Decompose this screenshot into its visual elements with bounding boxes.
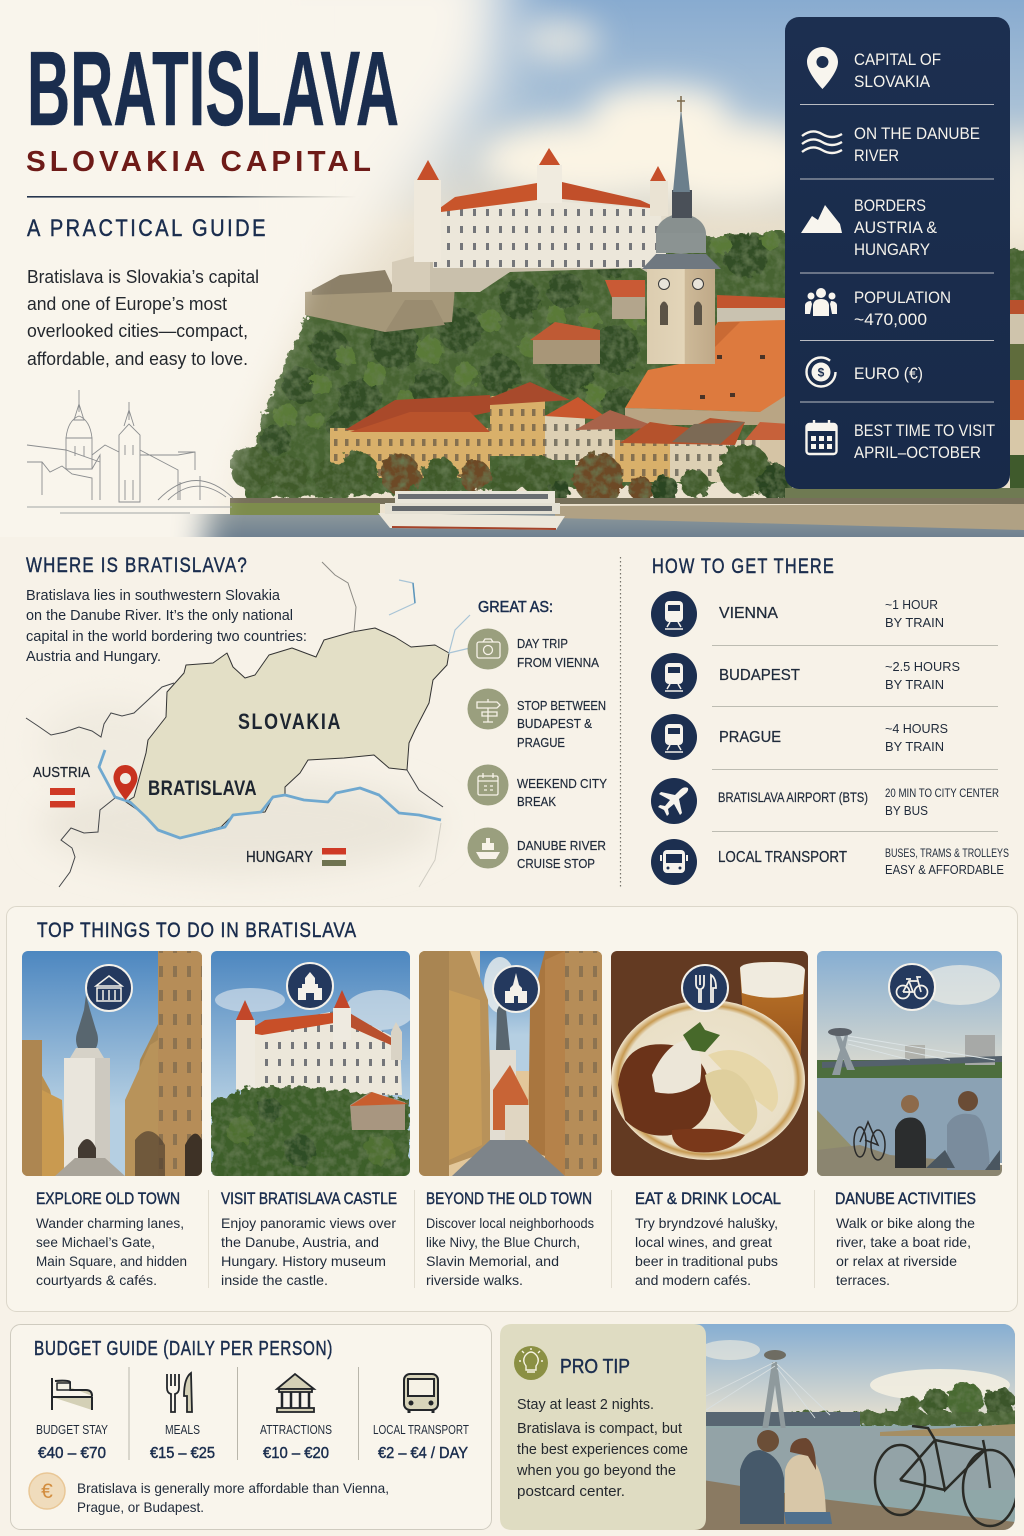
route: Vienna: VIENNA — [719, 605, 779, 622]
card text: Try bryndzové halušky, — [635, 1215, 778, 1231]
heading: pro tip: PRO TIP — [560, 1355, 630, 1378]
card: explore old town — [22, 951, 202, 1288]
label: Austria: AUSTRIA — [33, 764, 90, 781]
item: weekend break — [517, 776, 607, 809]
route: Vienna — [651, 591, 944, 637]
icon: coin — [806, 358, 836, 386]
card text — [635, 1215, 778, 1288]
panel: pro tip — [500, 1324, 1020, 1530]
tip text: Stay at least 2 nights. — [517, 1396, 654, 1413]
fact: capital: CAPITAL OF — [854, 51, 941, 69]
list: great as: GREAT AS: — [478, 599, 553, 616]
tip text: the best experiences come — [517, 1441, 688, 1458]
card text — [36, 1215, 187, 1288]
panel: quick facts — [785, 17, 1010, 489]
icon: coin: $ — [818, 366, 825, 380]
fact: danube: RIVER — [854, 147, 899, 165]
icon: map pin — [807, 47, 838, 89]
fact: euro: EURO (€) — [854, 365, 923, 383]
route: Budapest: ~2.5 HOURS — [885, 659, 960, 674]
card text: Hungary. History museum — [221, 1253, 386, 1269]
fact: capital: SLOVAKIA — [854, 73, 930, 91]
card text: Slavin Memorial, and — [426, 1253, 559, 1269]
card heading: EAT & DRINK LOCAL — [635, 1190, 781, 1208]
item: budget stay: €40 – €70 — [38, 1445, 106, 1462]
hero photo: castle and town — [182, 0, 1024, 537]
item: local transport: LOCAL TRANSPORT — [373, 1422, 469, 1437]
card text: local wines, and great — [635, 1234, 772, 1250]
icon: signpost — [468, 688, 508, 730]
fact: population: ~470,000 — [854, 311, 927, 329]
flag: Austria — [50, 788, 75, 808]
card text: the Danube, Austria, and — [221, 1234, 379, 1250]
icon: fork and knife — [167, 1373, 192, 1412]
card text: like Nivy, the Blue Church, — [426, 1234, 580, 1250]
fact: borders: HUNGARY — [854, 241, 930, 259]
budget note: Prague, or Budapest. — [77, 1499, 204, 1515]
card text: courtyards & cafés. — [36, 1272, 157, 1288]
card heading: EXPLORE OLD TOWN — [36, 1190, 180, 1208]
intro paragraph: overlooked cities—compact, — [27, 321, 248, 341]
tip text: Bratislava is compact, but — [517, 1420, 683, 1437]
sketch of city skyline — [27, 390, 233, 513]
card text — [426, 1215, 594, 1288]
route: Prague — [651, 714, 948, 760]
item: cruise stop: DANUBE RIVER — [517, 838, 606, 853]
fact: capital — [854, 54, 940, 87]
card text: Wander charming lanes, — [36, 1215, 184, 1231]
route: Vienna: ~1 HOUR — [885, 597, 938, 612]
item: local transport — [373, 1374, 469, 1462]
icon: camera — [468, 628, 508, 670]
item: day trip: FROM VIENNA — [517, 655, 599, 670]
item: stop between: BUDAPEST & — [517, 716, 592, 731]
route: airport: BRATISLAVA AIRPORT (BTS) — [718, 789, 868, 805]
item: weekend break: WEEKEND CITY — [517, 776, 607, 791]
label: Bratislava: BRATISLAVA — [148, 776, 257, 800]
description paragraph: Austria and Hungary. — [26, 649, 161, 665]
item: meals: MEALS — [165, 1422, 200, 1437]
card heading: DANUBE ACTIVITIES — [835, 1190, 976, 1208]
fact: best time: BEST TIME TO VISIT — [854, 422, 995, 440]
route: Budapest: BUDAPEST — [719, 667, 801, 684]
fact: danube — [854, 128, 980, 161]
item: stop between: STOP BETWEEN — [517, 698, 606, 713]
subtitle: SLOVAKIA CAPITAL — [26, 146, 375, 178]
photo: couple by the Danube — [600, 1324, 1020, 1530]
fact: best time: APRIL–OCTOBER — [854, 444, 981, 462]
budget note: Bratislava is generally more affordable than Vienna, — [77, 1480, 389, 1496]
route: Prague: ~4 HOURS — [885, 721, 948, 736]
panel: how to get there — [651, 554, 1009, 885]
card text: or relax at riverside — [836, 1253, 957, 1269]
card text: Enjoy panoramic views over — [221, 1215, 396, 1231]
budget note — [77, 1480, 389, 1515]
photo: cobbled street — [419, 951, 602, 1176]
label: Hungary: HUNGARY — [246, 849, 313, 866]
description paragraph: on the Danube River. It’s the only national — [26, 608, 293, 624]
intro paragraph: Bratislava is Slovakia’s capital — [27, 267, 259, 287]
fact: best time — [854, 424, 995, 458]
item: attractions: €10 – €20 — [263, 1445, 329, 1462]
hero panel — [26, 0, 1024, 537]
item: attractions — [260, 1374, 332, 1462]
heading: where is: WHERE IS BRATISLAVA? — [26, 553, 248, 577]
icon: euro coin — [29, 1473, 65, 1509]
route: local transport: EASY & AFFORDABLE — [885, 862, 1004, 877]
card text: Walk or bike along the — [836, 1215, 975, 1231]
route: local transport — [651, 839, 1009, 885]
heading: top things: TOP THINGS TO DO IN BRATISLAVA — [37, 919, 357, 942]
card text: riverside walks. — [426, 1272, 523, 1288]
item: budget stay: BUDGET STAY — [36, 1422, 108, 1437]
intro paragraph: and one of Europe’s most — [27, 294, 227, 314]
fact: borders — [854, 200, 937, 255]
flag: Hungary — [322, 848, 346, 866]
card text: terraces. — [836, 1272, 890, 1288]
icon badge: bicycle — [889, 964, 935, 1010]
fact: borders: BORDERS — [854, 197, 926, 215]
hill — [245, 230, 1024, 500]
fact: population: POPULATION — [854, 289, 951, 307]
route: Prague: BY TRAIN — [885, 739, 944, 754]
card text: and modern cafés. — [635, 1272, 751, 1288]
fact: danube: ON THE DANUBE — [854, 125, 980, 143]
list: great as — [468, 599, 607, 871]
icon badge: church — [493, 966, 539, 1012]
route: airport: BY BUS — [885, 803, 928, 818]
card text: river, take a boat ride, — [836, 1234, 971, 1250]
river cruise boat — [378, 491, 565, 530]
route: airport: 20 MIN TO CITY CENTER — [885, 786, 999, 800]
panel: top things to do — [6, 906, 1018, 1312]
card text: Main Square, and hidden — [36, 1253, 187, 1269]
fact: borders: AUSTRIA & — [854, 219, 937, 237]
card text: Discover local neighborhoods — [426, 1215, 594, 1231]
title: BRATISLAVA — [27, 30, 399, 148]
icon: bus — [404, 1374, 438, 1413]
mid-hill houses — [530, 280, 790, 364]
embankment and water — [182, 514, 1024, 537]
photo: castle — [211, 951, 415, 1180]
card: beyond old town — [419, 951, 602, 1288]
photo: UFO bridge riverside — [817, 951, 1002, 1176]
item: cruise stop: CRUISE STOP — [517, 856, 595, 871]
guide heading: A PRACTICAL GUIDE — [27, 215, 268, 242]
tip text: when you go beyond the — [516, 1462, 676, 1479]
riverside trees — [230, 444, 792, 498]
card: danube activities — [817, 951, 1002, 1288]
item: cruise stop — [517, 838, 606, 871]
heading: budget guide: BUDGET GUIDE (DAILY PER PERSON) — [34, 1338, 333, 1360]
photo: Michael's Gate street — [22, 951, 202, 1176]
item: stop between — [517, 698, 606, 750]
route: local transport: LOCAL TRANSPORT — [718, 849, 847, 866]
card text — [836, 1215, 975, 1288]
icon: mountains — [801, 205, 842, 233]
description paragraph: capital in the world bordering two countries: — [26, 629, 307, 645]
route: airport — [651, 778, 999, 824]
icon: bed — [52, 1378, 92, 1410]
icon: people — [805, 288, 837, 316]
item: budget stay — [36, 1378, 108, 1462]
heading: how to get there: HOW TO GET THERE — [652, 554, 835, 578]
label: Slovakia: SLOVAKIA — [238, 709, 342, 734]
card: eat and drink — [611, 951, 808, 1288]
item: day trip — [517, 636, 599, 670]
icon: temple — [277, 1374, 314, 1412]
item: day trip: DAY TRIP — [517, 636, 568, 651]
route: Budapest: BY TRAIN — [885, 677, 944, 692]
icon: waves — [802, 131, 842, 153]
route: Budapest — [651, 653, 960, 699]
old town buildings — [330, 300, 1024, 490]
card heading: BEYOND THE OLD TOWN — [426, 1190, 592, 1208]
panel: where is bratislava — [26, 553, 607, 887]
castle — [414, 148, 668, 268]
icon: euro coin: € — [41, 1480, 53, 1503]
item: local transport: €2 – €4 / DAY — [378, 1445, 468, 1462]
icon: light bulb — [514, 1346, 548, 1380]
item: weekend break: BREAK — [517, 794, 556, 809]
cream fade over hero — [0, 287, 318, 537]
card text — [221, 1215, 396, 1288]
icon badge: cutlery — [682, 965, 728, 1011]
description paragraph: Bratislava lies in southwestern Slovakia — [26, 588, 281, 604]
fact: population — [854, 292, 950, 328]
icon: ship — [468, 828, 508, 868]
item: attractions: ATTRACTIONS — [260, 1422, 332, 1437]
tip text: postcard center. — [517, 1483, 625, 1500]
map of Slovakia — [26, 562, 470, 887]
item: meals — [150, 1373, 215, 1462]
icon badge: castle — [287, 963, 333, 1009]
card heading: VISIT BRATISLAVA CASTLE — [221, 1190, 397, 1208]
intro paragraph — [27, 267, 259, 369]
icon badge: gate — [86, 965, 132, 1011]
cathedral church — [625, 96, 790, 425]
icon: calendar small — [468, 764, 508, 806]
card: visit castle — [211, 951, 415, 1288]
intro paragraph: affordable, and easy to love. — [27, 349, 248, 369]
card text: inside the castle. — [221, 1272, 328, 1288]
card text: beer in traditional pubs — [635, 1253, 778, 1269]
route: Vienna: BY TRAIN — [885, 615, 944, 630]
description paragraph — [26, 588, 307, 665]
panel: budget guide — [10, 1324, 492, 1530]
card text: see Michael’s Gate, — [36, 1234, 155, 1250]
photo: halusky and beer — [611, 951, 808, 1176]
fortification wall — [305, 291, 455, 332]
icon: location pin — [114, 765, 138, 800]
tip text — [516, 1396, 688, 1500]
route: Prague: PRAGUE — [719, 729, 781, 746]
icon: calendar — [806, 420, 836, 454]
item: meals: €15 – €25 — [150, 1445, 215, 1462]
item: stop between: PRAGUE — [517, 735, 565, 750]
